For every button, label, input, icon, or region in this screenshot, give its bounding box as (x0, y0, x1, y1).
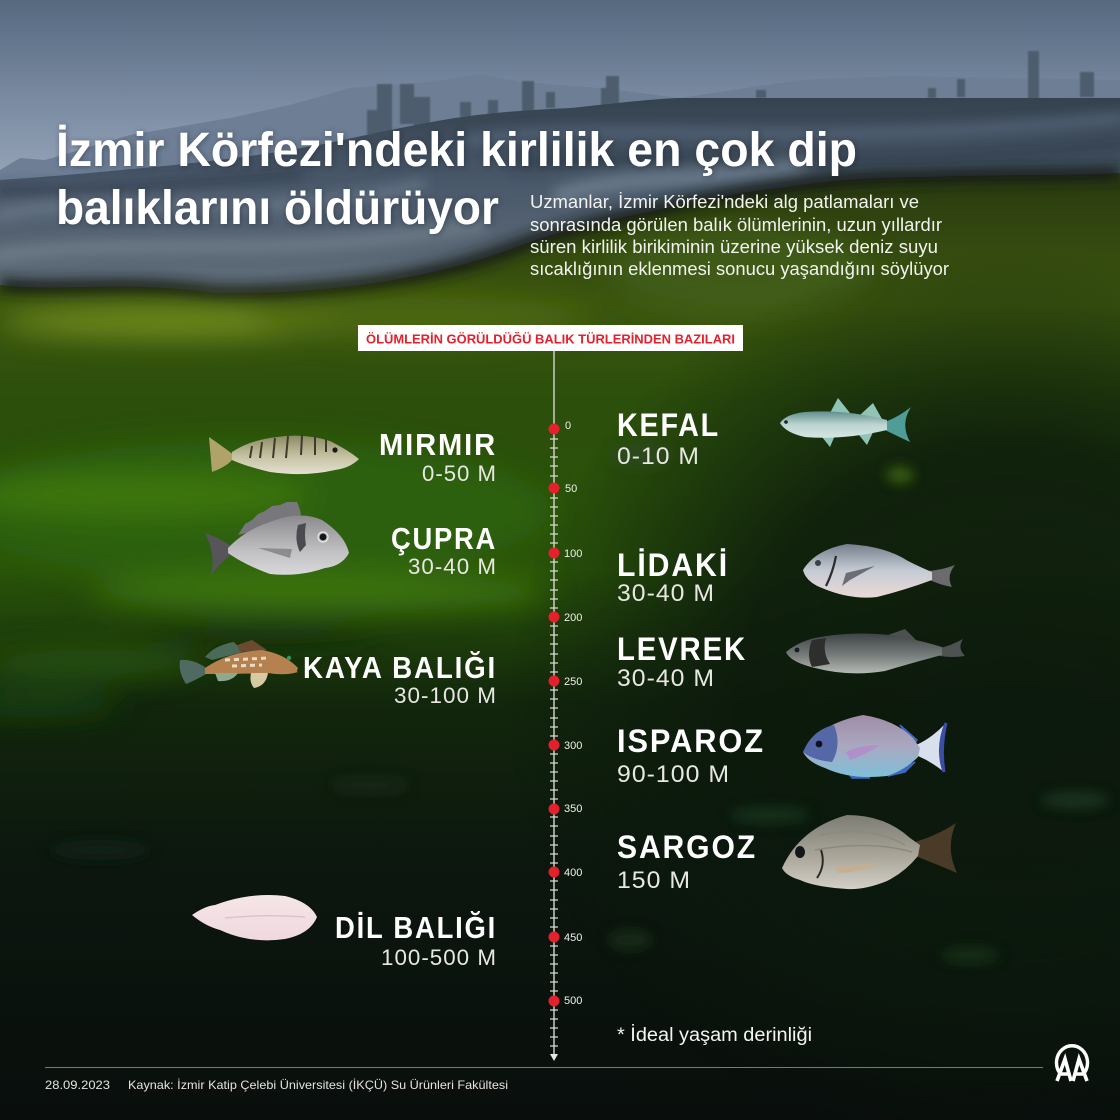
small sediment glows (50, 443, 1109, 963)
label: çupra (391, 521, 497, 579)
sky (0, 0, 1120, 190)
axis depth numbers: 400 (564, 867, 582, 879)
label: ısparoz (617, 723, 765, 788)
axis depth numbers: 200 (564, 612, 582, 624)
axis depth numbers: 500 (564, 995, 582, 1007)
label: kefal: 0-10 M (617, 443, 700, 470)
label: levrek (617, 631, 747, 692)
fish: kefal (780, 398, 911, 447)
label: kaya balığı (303, 650, 497, 708)
intro text: Uzmanlar, İzmir Körfezi'ndeki alg patlamaları ve (530, 192, 919, 212)
label: sargoz (617, 829, 757, 894)
fish: lidaki (803, 544, 955, 598)
label: dil balığı (335, 910, 497, 970)
mountains and city skyline (0, 51, 1120, 190)
label: dil balığı: DİL BALIĞI (335, 910, 497, 945)
water surface (0, 98, 1120, 320)
label: mırmır (379, 427, 497, 486)
intro text: süren kirlilik birikiminin üzerine yüksek deniz suyu (530, 237, 938, 257)
footer source: Kaynak: İzmir Katip Çelebi Üniversitesi (İKÇÜ) Su Ürünleri Fakültesi (128, 1078, 508, 1092)
label: mırmır: MIRMIR (379, 427, 497, 462)
axis depth numbers: 300 (564, 740, 582, 752)
label: kaya balığı: KAYA BALIĞI (303, 650, 497, 685)
axis depth numbers: 50 (565, 483, 577, 495)
title (56, 124, 858, 236)
label: mırmır: 0-50 M (422, 461, 497, 486)
fish: sargoz (782, 815, 957, 889)
footer line (45, 1066, 1043, 1068)
green light bands (0, 225, 870, 718)
fish: dil balığı (192, 895, 317, 940)
axis red markers (548, 424, 560, 1006)
axis depth numbers: 0 (565, 420, 571, 432)
axis depth numbers: 350 (564, 803, 582, 815)
label: çupra: ÇUPRA (391, 521, 497, 556)
heading label: ÖLÜMLERİN GÖRÜLDÜĞÜ BALIK TÜRLERİNDEN BAZILARI (366, 332, 735, 346)
logo: AA (1056, 1046, 1088, 1081)
label: lidaki: 30-40 M (617, 580, 715, 607)
depth axis (548, 351, 582, 1061)
label: lidaki: LİDAKİ (617, 547, 729, 583)
fish: mırmır (209, 435, 359, 474)
title: İzmir Körfezi'ndeki kirlilik en çok dip (57, 125, 858, 178)
fish: ısparoz (803, 715, 946, 778)
label: kefal (617, 407, 720, 470)
footer date: 28.09.2023 (45, 1078, 110, 1092)
wave highlights (0, 118, 1120, 255)
fish: levrek (786, 629, 965, 673)
axis depth numbers: 100 (564, 548, 582, 560)
waterline shadow (0, 173, 1120, 293)
label: levrek: 30-40 M (617, 665, 715, 692)
axis depth numbers: 450 (564, 932, 582, 944)
title: balıklarını öldürüyor (56, 182, 499, 235)
footnote: * İdeal yaşam derinliği (617, 1025, 812, 1046)
label: levrek: LEVREK (617, 631, 747, 667)
intro text: sıcaklığının eklenmesi sonucu yaşandığını söylüyor (530, 259, 949, 279)
axis depth numbers: 250 (564, 676, 582, 688)
title: İzmir Körfezi'ndeki kirlilik en çok dip (56, 124, 857, 177)
label: sargoz: SARGOZ (617, 829, 757, 865)
label: kefal: KEFAL (617, 407, 720, 443)
label: sargoz: 150 M (617, 867, 691, 894)
label: dil balığı: 100-500 M (381, 945, 497, 970)
intro text: sonrasında görülen balık ölümlerinin, uzun yıllardır (530, 215, 942, 235)
title: balıklarını öldürüyor (57, 183, 500, 236)
label: lidaki (617, 547, 729, 607)
axis depth numbers (564, 420, 582, 1007)
darker right side of the water (510, 250, 1120, 1120)
label: çupra: 30-40 M (408, 554, 497, 579)
fish: çupra (205, 502, 349, 575)
label: ısparoz: ISPAROZ (617, 723, 765, 759)
axis arrowhead (550, 1054, 558, 1061)
intro text (530, 192, 949, 279)
fish: kaya balığı (180, 640, 298, 688)
label: ısparoz: 90-100 M (617, 761, 730, 788)
heading label (358, 325, 743, 351)
label: kaya balığı: 30-100 M (394, 683, 497, 708)
axis ticks (550, 439, 558, 1046)
